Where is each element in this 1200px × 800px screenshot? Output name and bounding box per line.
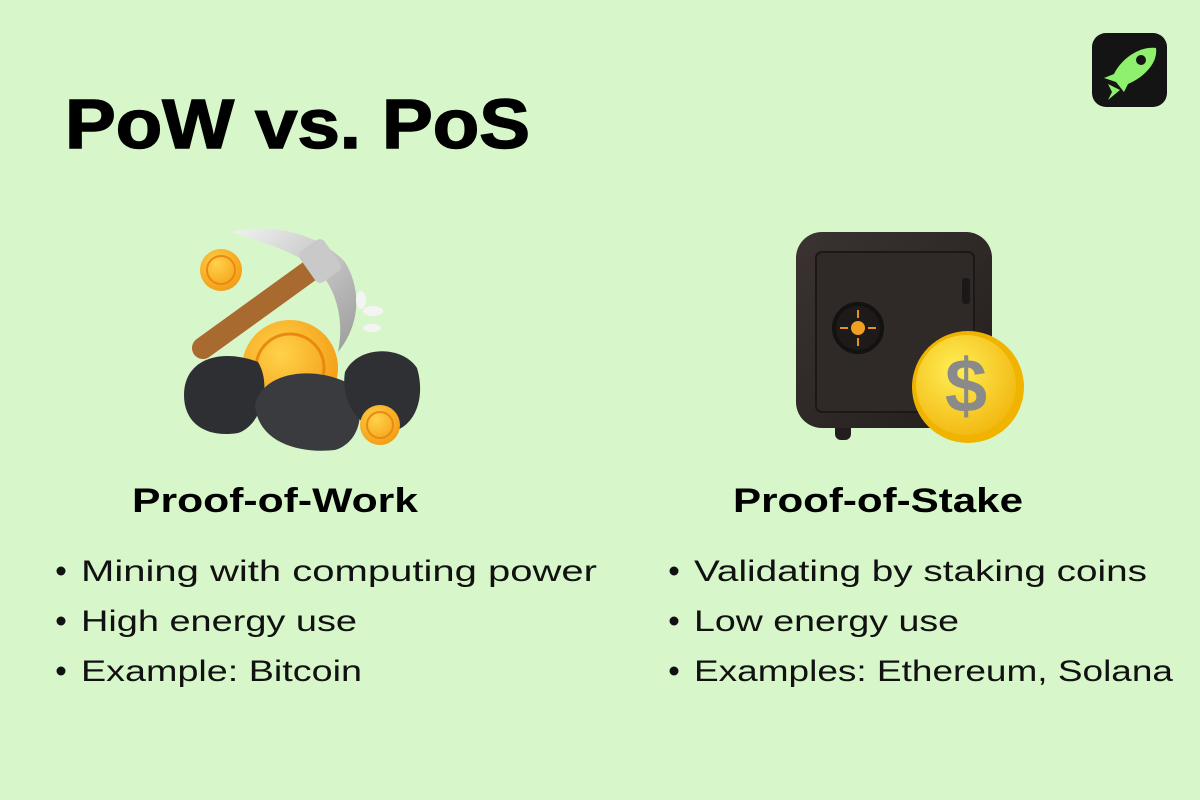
- logo: rocket: [1092, 33, 1167, 107]
- heading: Proof-of-Work: Proof-of-Work: [132, 482, 418, 520]
- list: PoS bullets: [670, 555, 1173, 688]
- icon: safe with dollar coin: [796, 232, 1024, 443]
- icon: pickaxe with coins and rocks: [184, 229, 420, 451]
- list: PoS bullets: Examples: Ethereum, Solana: [694, 655, 1173, 688]
- heading: Proof-of-Stake: Proof-of-Stake: [733, 482, 1023, 520]
- list: PoS bullets: Validating by staking coins: [694, 555, 1147, 588]
- list: PoW bullets: High energy use: [81, 605, 357, 638]
- title: PoW vs. PoS: [65, 85, 530, 163]
- list: PoS bullets: Low energy use: [694, 605, 959, 638]
- list: PoW bullets: Mining with computing power: [81, 555, 597, 588]
- list: PoW bullets: Example: Bitcoin: [81, 655, 362, 688]
- icon: safe with dollar coin: $: [945, 344, 987, 429]
- list: PoW bullets: [56, 555, 597, 688]
